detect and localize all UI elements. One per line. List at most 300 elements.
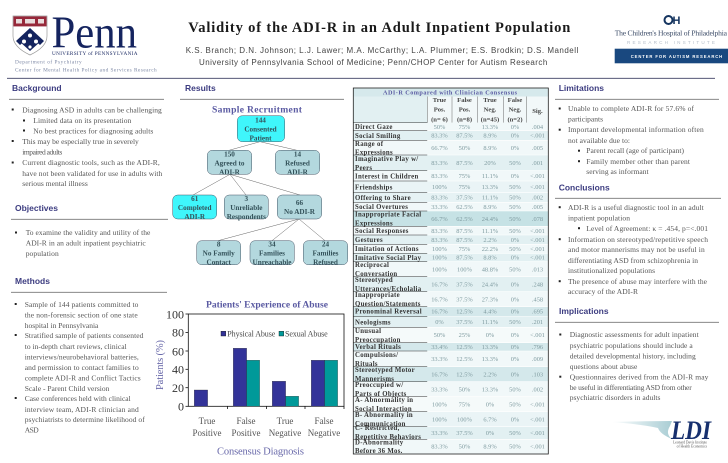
row values: 75%: [459, 184, 471, 191]
row values: 8.9%: [483, 444, 497, 451]
row values: 87.5%: [456, 228, 473, 235]
conclusions bullets: ADI-R is a useful diagnostic tool in an adult: [568, 203, 705, 212]
legend: Physical Abuse: [227, 330, 276, 338]
hospital name: The Children's Hospital of Philadelphia: [615, 28, 728, 38]
row values: <.001: [530, 184, 545, 191]
y axis labels: 40: [172, 362, 184, 376]
box: 150 agreed: 150: [224, 150, 235, 158]
conclusions bullets: [559, 203, 708, 296]
row values: 0%: [511, 237, 520, 244]
table rows: [353, 123, 548, 455]
row values: 48.8%: [482, 266, 499, 273]
row values: 66.7%: [431, 145, 448, 152]
center banner: CENTER FOR AUTISM RESEARCH: [631, 54, 722, 59]
y axis labels: 60: [172, 344, 184, 358]
row values: 100%: [432, 416, 448, 423]
x axis labels: Negative: [269, 428, 301, 438]
methods bullets: and permission to contact families to: [25, 363, 139, 372]
table column headers: (n=8): [457, 116, 472, 124]
methods bullets: complete ADI-R and Conflict Tactics: [25, 374, 141, 382]
row values: <.001: [530, 416, 545, 423]
row values: 12.5%: [456, 371, 473, 378]
row labels: Utterances/Echolalia: [355, 286, 422, 293]
row values: .009: [532, 356, 543, 363]
methods bullets: the non-forensic section of one state: [25, 310, 138, 320]
table column headers: (n= 6): [431, 116, 448, 124]
conclusions bullets: Level of Agreement: κ = .454, p=<.001: [586, 224, 708, 233]
row values: 0%: [511, 281, 520, 288]
row values: 0%: [511, 309, 520, 316]
row values: .005: [532, 204, 543, 211]
table: ADI-R compared with clinician consensus: [353, 88, 548, 455]
row values: 62.5%: [456, 204, 473, 211]
row values: 12.5%: [456, 309, 473, 316]
row values: 13.3%: [482, 386, 499, 393]
row labels: Direct Gaze: [355, 124, 393, 131]
row values: 83.3%: [431, 133, 448, 140]
row values: .458: [532, 296, 543, 303]
table title row: ADI-R Compared with Clinician Consensus: [383, 90, 518, 96]
row values: 50%: [434, 124, 446, 131]
bars: physical abuse: [194, 348, 325, 406]
row values: 50%: [509, 228, 522, 235]
methods bullets: hospital in Pennsylvania: [25, 321, 99, 330]
row values: <.001: [530, 173, 545, 180]
x axis labels: True: [199, 416, 215, 426]
row values: <.001: [530, 401, 545, 408]
row values: 2.2%: [483, 237, 497, 244]
conclusions bullets: institutionalized populations: [568, 266, 655, 275]
box: 150 agreed: Agreed to: [214, 160, 245, 168]
table column headers: True: [483, 97, 497, 104]
row labels: Social Interaction: [355, 406, 412, 413]
background bullets: Current diagnostic tools, such as the ADI-R,: [22, 158, 160, 167]
row values: 50%: [509, 184, 522, 191]
table column headers: True: [433, 97, 446, 104]
row values: <.001: [530, 237, 545, 244]
row backgrounds: [353, 123, 548, 454]
box: 14 refused: Refused: [285, 160, 310, 168]
limitations bullets: Parent recall (age of participant): [586, 146, 684, 155]
Penn wordmark: Penn: [52, 6, 137, 58]
row values: .002: [532, 386, 543, 393]
row values: 50%: [459, 386, 471, 393]
row values: 87.5%: [456, 133, 473, 140]
row values: 100%: [432, 246, 448, 253]
box: 61 completed: Completed: [178, 204, 211, 212]
table column headers: Pos.: [459, 106, 471, 114]
objectives bullet: population: [26, 249, 59, 258]
row values: 8.9%: [483, 145, 497, 152]
methods bullets: Stratified sample of patients consented: [25, 331, 144, 340]
row values: 22.2%: [482, 246, 499, 253]
row values: 16.7%: [431, 309, 448, 316]
department names: Department of Psychiatry: [15, 58, 82, 65]
row values: 66.7%: [431, 216, 448, 223]
row values: 2.2%: [483, 371, 497, 378]
x axis labels: Negative: [308, 428, 340, 438]
limitations bullets: Unable to complete ADI-R for 57.6% of: [568, 104, 694, 113]
bars: sexual abuse: [247, 360, 338, 406]
row values: 27.3%: [482, 296, 499, 303]
legend: Sexual Abuse: [285, 330, 328, 338]
row labels: Expressions: [355, 220, 393, 228]
row values: [431, 124, 545, 451]
row values: 83.3%: [431, 173, 448, 180]
panel: methods: [11, 276, 167, 434]
row values: .005: [532, 145, 543, 152]
legend: [221, 330, 328, 338]
row values: 75%: [459, 401, 471, 408]
row values: 50%: [434, 332, 446, 339]
row values: .004: [532, 124, 544, 131]
row values: .796: [532, 344, 543, 351]
row values: 20%: [484, 160, 497, 167]
row values: 100%: [457, 416, 473, 423]
row values: 16.7%: [431, 296, 448, 303]
box: 8 no family contact: No Family: [203, 250, 235, 258]
row labels: Social Responses: [355, 228, 409, 235]
heading: objectives: Objectives: [15, 203, 58, 213]
row values: 50%: [509, 430, 522, 437]
row values: 87.5%: [456, 255, 473, 262]
row values: 24.4%: [482, 281, 499, 288]
heading: background: Background: [12, 83, 62, 93]
box: 3 unreliable: [224, 195, 268, 221]
objectives bullet: To examine the validity and utility of the: [26, 228, 151, 237]
row values: .002: [532, 194, 543, 202]
row values: 37.5%: [456, 281, 473, 288]
y axis labels: 80: [172, 326, 184, 340]
row labels: Rituals: [355, 361, 378, 368]
methods bullets: to in-depth chart reviews, clinical: [25, 342, 127, 351]
row labels: Question/Statements: [355, 301, 421, 308]
chart title: Patients' Experience of Abuse: [206, 300, 329, 310]
row values: 4.4%: [483, 309, 497, 316]
row values: <.001: [530, 133, 545, 140]
row values: 13.3%: [482, 356, 499, 363]
row values: 8.9%: [483, 204, 497, 211]
Penn logo: [13, 6, 157, 73]
row values: 75%: [459, 124, 471, 131]
limitations bullets: Important developmental information often: [568, 125, 704, 134]
row values: 75%: [459, 246, 471, 253]
row labels: Stereotyped Motor: [355, 367, 415, 374]
y axis labels: 0: [178, 400, 184, 414]
row values: <.001: [530, 255, 545, 262]
flowchart title: Sample Recruitment: [212, 104, 303, 116]
table column headers: (n=2): [507, 116, 523, 124]
box: 144 consented: [237, 116, 285, 142]
methods bullets: Scale - Parent Child version: [25, 384, 110, 393]
box: 150 agreed: [207, 150, 252, 176]
LDI name: of Health Economics: [677, 444, 708, 448]
box: 34 families unreachable: Unreachable: [252, 258, 292, 266]
box: 61 completed: ADI-R: [184, 213, 206, 221]
box: 24 families refused: 24: [322, 240, 330, 248]
methods bullets: interviews/neurobehavioral batteries,: [25, 352, 139, 362]
row labels: Mannerisms: [355, 376, 394, 383]
row values: 100%: [432, 266, 448, 273]
row labels: Pronominal Reversal: [355, 308, 422, 316]
conclusions bullets: accuracy of the ADI-R: [568, 287, 638, 296]
row labels: Communication: [355, 421, 406, 428]
row labels: Imaginative Play w/: [355, 156, 418, 163]
row values: 50%: [509, 160, 522, 167]
objectives bullet: ADI-R in an adult inpatient psychiatric: [26, 238, 146, 248]
row labels: Inappropriate Facial: [355, 212, 421, 218]
row values: 33.3%: [431, 356, 448, 363]
row values: 62.5%: [456, 216, 473, 223]
row values: 37.5%: [456, 194, 473, 202]
implications bullets: detailed developmental history, including: [570, 352, 696, 360]
box: 8 no family contact: Contact: [207, 258, 231, 266]
row values: 50%: [459, 145, 471, 152]
box: 61 completed: 61: [191, 195, 199, 203]
background bullets: serious mental illness: [22, 179, 88, 188]
row values: 50%: [509, 386, 522, 393]
table title row: [353, 88, 548, 96]
row labels: Gestures: [355, 237, 383, 244]
y axis labels: 20: [172, 381, 184, 395]
box: 61 completed: [173, 195, 217, 221]
row values: 0%: [511, 173, 520, 180]
methods bullets: Sample of 144 patients committed to: [25, 300, 139, 309]
row labels: Reciprocal: [355, 262, 389, 269]
row values: 100%: [432, 184, 448, 191]
row values: 0%: [486, 332, 495, 339]
row labels: Friendships: [355, 184, 393, 192]
box: 3 unreliable: 3: [245, 195, 249, 203]
research institute: RESEARCH INSTITUTE: [627, 40, 715, 45]
panel: implications: [555, 306, 719, 402]
row values: 83.3%: [431, 237, 448, 244]
implications bullets: psychiatric disorders in adults: [570, 393, 660, 402]
box: 14 refused: [275, 150, 320, 176]
methods bullets: interview team, ADI-R clinician and: [25, 405, 139, 414]
panel: background: [9, 83, 164, 188]
row values: 8.9%: [483, 133, 497, 140]
row values: <.001: [530, 332, 545, 339]
row labels: Stereotyped: [355, 277, 393, 284]
CHOP logo: [615, 15, 728, 63]
row values: 83.3%: [431, 228, 448, 235]
box: 34 families unreachable: [250, 240, 294, 266]
row values: 50%: [509, 216, 522, 223]
row values: 11.1%: [482, 319, 499, 326]
y axis title: Patients (%): [155, 340, 166, 390]
box: 8 no family contact: 8: [217, 240, 221, 248]
row values: 33.3%: [431, 430, 448, 437]
row values: 37.5%: [456, 296, 473, 303]
row values: 0%: [511, 344, 520, 351]
table column headers: Neg.: [509, 106, 522, 114]
heading: methods: Methods: [15, 276, 50, 286]
row labels: Inappropriate: [355, 292, 400, 299]
row values: 0%: [511, 356, 520, 363]
row values: 16.7%: [431, 281, 448, 288]
x axis labels: [192, 416, 340, 438]
implications bullets: questions about abuse: [570, 362, 638, 371]
limitations bullets: Family member other than parent: [586, 157, 691, 166]
y axis labels: 100: [166, 308, 184, 322]
row labels: Conversation: [355, 271, 398, 278]
conclusions bullets: differentiating ASD from schizophrenia in: [568, 256, 698, 265]
row values: 33.4%: [431, 344, 448, 351]
row values: 6.7%: [483, 416, 497, 423]
row values: 100%: [432, 401, 448, 408]
box: 14 refused: ADI-R: [287, 168, 309, 176]
row labels: Parts of Objects: [355, 391, 407, 398]
limitations bullets: participants: [568, 114, 603, 124]
row values: 100%: [432, 255, 448, 262]
table column headers: [353, 96, 548, 124]
limitations bullets: serving as informant: [586, 167, 650, 176]
row values: 37.5%: [456, 430, 473, 437]
row values: .013: [532, 266, 543, 273]
plot frame: [188, 314, 344, 406]
row labels: B- Abnormality in: [355, 412, 413, 419]
heading: implications: Implications: [559, 306, 609, 316]
objectives bullet: [15, 228, 151, 258]
row labels: Repetitive Behaviors: [355, 434, 421, 441]
background bullets: Limited data on its presentation: [33, 116, 132, 125]
LDI letters: LDI: [670, 416, 712, 445]
methods bullets: ASD: [25, 426, 39, 434]
row values: 0%: [486, 430, 495, 437]
row labels: Expressions: [355, 150, 393, 156]
y axis labels: [166, 308, 184, 414]
row values: 8.8%: [483, 255, 497, 262]
row labels: Imitation of Actions: [355, 246, 419, 253]
box: 3 unreliable: Unreliable: [230, 204, 262, 212]
row values: 24.4%: [482, 216, 499, 223]
row values: 11.1%: [482, 194, 499, 202]
background bullets: impaired adults: [22, 148, 62, 156]
panel: conclusions: [555, 182, 721, 296]
limitations bullets: not available due to:: [568, 136, 630, 145]
logo swoosh: [611, 421, 672, 439]
row values: 0%: [435, 319, 444, 326]
table column headers: Pos.: [434, 106, 446, 114]
authors: K.S. Branch; D.N. Johnson; L.J. Lawer; M.A. McCarthy; L.A. Plummer; E.S. Brodkin; D.S. Mandell: [186, 46, 579, 55]
row values: 25%: [459, 332, 471, 339]
row labels: Range of: [355, 141, 384, 148]
row values: 13.3%: [482, 344, 499, 351]
x axis labels: False: [236, 416, 256, 426]
implications bullets: Questionnaires derived from the ADI-R may: [570, 372, 709, 382]
background bullets: have not been validated for use in adults with: [22, 169, 163, 178]
box: 24 families refused: [303, 240, 348, 266]
row values: 0%: [511, 145, 520, 152]
row values: .695: [532, 309, 543, 316]
row labels: [355, 124, 422, 455]
implications bullets: [559, 330, 709, 402]
box: 144 consented: 144: [255, 116, 266, 124]
x axis labels: True: [277, 416, 293, 426]
box: 144 consented: Patient: [250, 134, 272, 142]
background bullets: Diagnosing ASD in adults can be challenging: [22, 105, 162, 114]
row labels: Imitative Social Play: [355, 255, 422, 262]
row values: .201: [532, 319, 543, 326]
row values: 50%: [509, 266, 522, 273]
row labels: Before 36 Mos.: [355, 448, 403, 455]
row values: .103: [532, 371, 543, 378]
conclusions bullets: The presence of abuse may interfere with the: [568, 277, 708, 286]
icon: CHOP mark: H: [672, 15, 680, 27]
row values: 50%: [459, 444, 471, 451]
row values: 0%: [486, 401, 495, 408]
row values: .078: [532, 216, 543, 223]
table column headers: Neg.: [484, 106, 497, 114]
row labels: Unusual: [355, 328, 381, 335]
row labels: Offering to Share: [355, 195, 411, 202]
x axis labels: Positive: [231, 428, 261, 438]
row values: 33.3%: [431, 204, 448, 211]
row values: 0%: [511, 371, 520, 378]
methods bullets: Case conferences held with clinical: [25, 394, 131, 403]
methods bullets: psychiatrists to determine likelihood of: [25, 415, 145, 424]
row values: 87.5%: [456, 237, 473, 244]
row values: 13.3%: [482, 124, 499, 131]
implications bullets: be useful in differentiating ASD from other: [570, 383, 692, 392]
Penn logo: Center for Mental Health Policy and Services Research: [15, 66, 157, 73]
row values: 83.3%: [431, 444, 448, 451]
row values: 83.3%: [431, 194, 448, 202]
table column headers: False: [508, 97, 522, 104]
row labels: Neologisms: [355, 320, 391, 326]
row values: .248: [532, 281, 543, 288]
heading: results: Results: [185, 83, 216, 93]
heading: limitations: Limitations: [559, 83, 604, 93]
table column headers: (n=45): [481, 116, 499, 124]
box: 24 families refused: Families: [313, 250, 339, 258]
row labels: Interest in Children: [355, 174, 419, 180]
background bullets: No best practices for diagnosing adults: [33, 126, 153, 135]
row labels: Preoccupation: [355, 337, 401, 344]
row values: <.001: [530, 444, 545, 451]
row values: 12.5%: [456, 344, 473, 351]
row values: <.001: [530, 430, 545, 437]
box: 24 families refused: Refused: [313, 258, 338, 266]
bar chart: patients' experience of abuse: [155, 300, 344, 458]
x axis title: Consensus Diagnosis: [217, 446, 304, 458]
box: 8 no family contact: [197, 240, 241, 266]
x axis labels: Positive: [192, 428, 222, 438]
row values: <.001: [530, 246, 545, 253]
box: 144 consented: Consented: [244, 126, 277, 134]
row labels: C- Restricted,: [355, 425, 400, 432]
row values: <.001: [530, 228, 545, 235]
row values: 11.1%: [482, 173, 499, 180]
row values: 0%: [511, 133, 520, 140]
row values: 11.1%: [482, 228, 499, 235]
row values: 0%: [511, 332, 520, 339]
background bullets: This may be especially true in severely: [22, 137, 139, 146]
table column headers: Sig.: [532, 108, 543, 115]
row values: 37.5%: [456, 319, 473, 326]
methods bullets: [15, 300, 145, 434]
box: 34 families unreachable: Families: [259, 250, 285, 258]
row labels: D-Abnormality: [355, 440, 404, 446]
background bullets: [12, 105, 163, 188]
heading: conclusions: Conclusions: [559, 182, 610, 192]
conclusions bullets: Information on stereotyped/repetitive speech: [568, 235, 708, 244]
row labels: Social Overtures: [355, 204, 408, 211]
row labels: Social Smiling: [355, 133, 401, 140]
icon: Penn shield: [13, 16, 47, 55]
row values: 13.3%: [482, 184, 499, 191]
